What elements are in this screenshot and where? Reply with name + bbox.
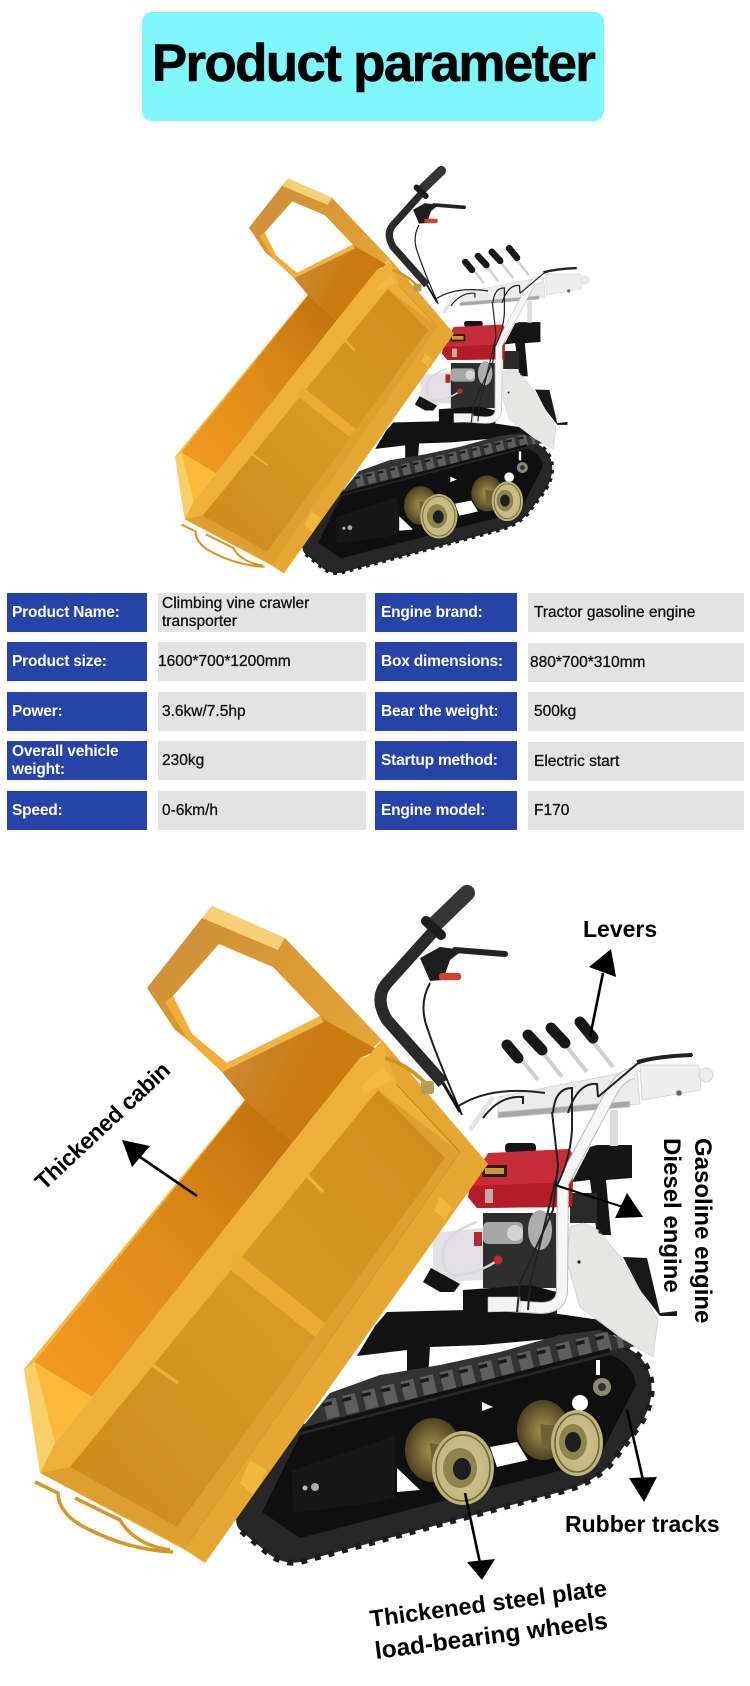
arrow bbox=[465, 1493, 495, 1580]
load-bearing wheels bbox=[405, 1378, 611, 1505]
callout: load-bearing wheels: Thickened steel plate bbox=[368, 1576, 608, 1633]
row: power / bear the weight: 500kg bbox=[534, 702, 576, 720]
row: product size / box dimensions: Box dimensions: bbox=[381, 652, 503, 670]
row: speed / engine model: Speed: bbox=[12, 802, 62, 818]
machine bbox=[24, 893, 713, 1563]
row: product name / engine brand: transporter bbox=[162, 612, 237, 630]
bin outer flange bbox=[185, 1040, 488, 1563]
tipping cargo bin bbox=[24, 906, 488, 1563]
top machine illustration bbox=[174, 166, 590, 575]
bin floor bbox=[70, 1090, 445, 1527]
rear frame bbox=[570, 1110, 677, 1316]
bin rim bbox=[40, 1040, 488, 1563]
row: product size / box dimensions bbox=[7, 642, 744, 682]
callout: levers: Levers bbox=[583, 916, 657, 942]
callout: gasoline / diesel engine: Gasoline engine bbox=[689, 1138, 716, 1323]
bin end wall with handle opening bbox=[147, 906, 382, 1142]
side plate bbox=[292, 1435, 395, 1513]
row: power / bear the weight: 3.6kw/7.5hp bbox=[162, 702, 246, 720]
callout: load-bearing wheels bbox=[368, 1493, 609, 1665]
arrow bbox=[555, 1185, 643, 1218]
callout: gasoline / diesel engine: Diesel engine bbox=[658, 1138, 685, 1293]
white handle tube bbox=[470, 1073, 634, 1312]
row: power / bear the weight bbox=[7, 692, 744, 731]
row: speed / engine model: 0-6km/h bbox=[162, 802, 218, 818]
row: product size / box dimensions: 1600*700*1200mm bbox=[158, 652, 291, 670]
arrow bbox=[122, 1140, 197, 1196]
hinge bbox=[360, 1067, 393, 1094]
row: power / bear the weight: Bear the weight: bbox=[381, 702, 498, 720]
row: product size / box dimensions: Product size: bbox=[12, 652, 107, 670]
ribs bbox=[148, 1168, 323, 1383]
row: speed / engine model: F170 bbox=[534, 802, 569, 818]
arrow bbox=[589, 949, 616, 1037]
callout: rubber tracks bbox=[565, 1410, 720, 1537]
title banner: Product parameter bbox=[152, 34, 594, 93]
bin front triangle bbox=[24, 1362, 55, 1473]
side tabs bbox=[240, 1197, 452, 1495]
row: product name / engine brand: Tractor gasoline engine bbox=[534, 604, 695, 620]
row: overall weight / startup method: weight: bbox=[12, 760, 65, 778]
callout: rubber tracks: Rubber tracks bbox=[565, 1511, 720, 1537]
row: product name / engine brand: Engine brand: bbox=[381, 604, 483, 620]
row: speed / engine model bbox=[7, 791, 744, 830]
white cover bbox=[567, 1223, 658, 1357]
row: product name / engine brand: Climbing vine crawler bbox=[162, 594, 309, 612]
cables bbox=[457, 1055, 693, 1312]
callout: thickened cabin: Thickened cabin bbox=[30, 1057, 175, 1195]
title banner bbox=[142, 12, 604, 121]
engine block bbox=[423, 1210, 557, 1325]
levers bbox=[507, 1022, 613, 1080]
crossbar bbox=[227, 1253, 325, 1337]
row: overall weight / startup method: Startup method: bbox=[381, 752, 498, 768]
row: product name / engine brand: Product Name: bbox=[12, 604, 120, 620]
callout: levers bbox=[583, 916, 657, 1037]
row: overall weight / startup method: Overall vehicle bbox=[12, 742, 118, 760]
row: product size / box dimensions: 880*700*310mm bbox=[530, 654, 645, 670]
rubber track bbox=[236, 1330, 652, 1563]
handlebar bbox=[380, 893, 505, 1115]
row: overall weight / startup method bbox=[7, 741, 744, 781]
rear handle bbox=[35, 1482, 173, 1552]
fuel tank bbox=[468, 1143, 573, 1208]
row: product name / engine brand bbox=[7, 593, 744, 632]
row: speed / engine model: Engine model: bbox=[381, 802, 485, 818]
chassis bbox=[357, 1310, 620, 1378]
row: overall weight / startup method: Electric start bbox=[534, 752, 619, 770]
annotated machine diagram bbox=[24, 885, 720, 1665]
callout: gasoline / diesel engine bbox=[555, 1138, 716, 1323]
arrow bbox=[627, 1410, 657, 1502]
callout: load-bearing wheels: load-bearing wheels bbox=[373, 1608, 609, 1665]
row: power / bear the weight: Power: bbox=[12, 702, 62, 720]
lever panel bbox=[498, 1065, 713, 1118]
specification table bbox=[7, 593, 744, 830]
row: overall weight / startup method: 230kg bbox=[162, 752, 204, 768]
bin side wall bbox=[34, 1100, 293, 1397]
